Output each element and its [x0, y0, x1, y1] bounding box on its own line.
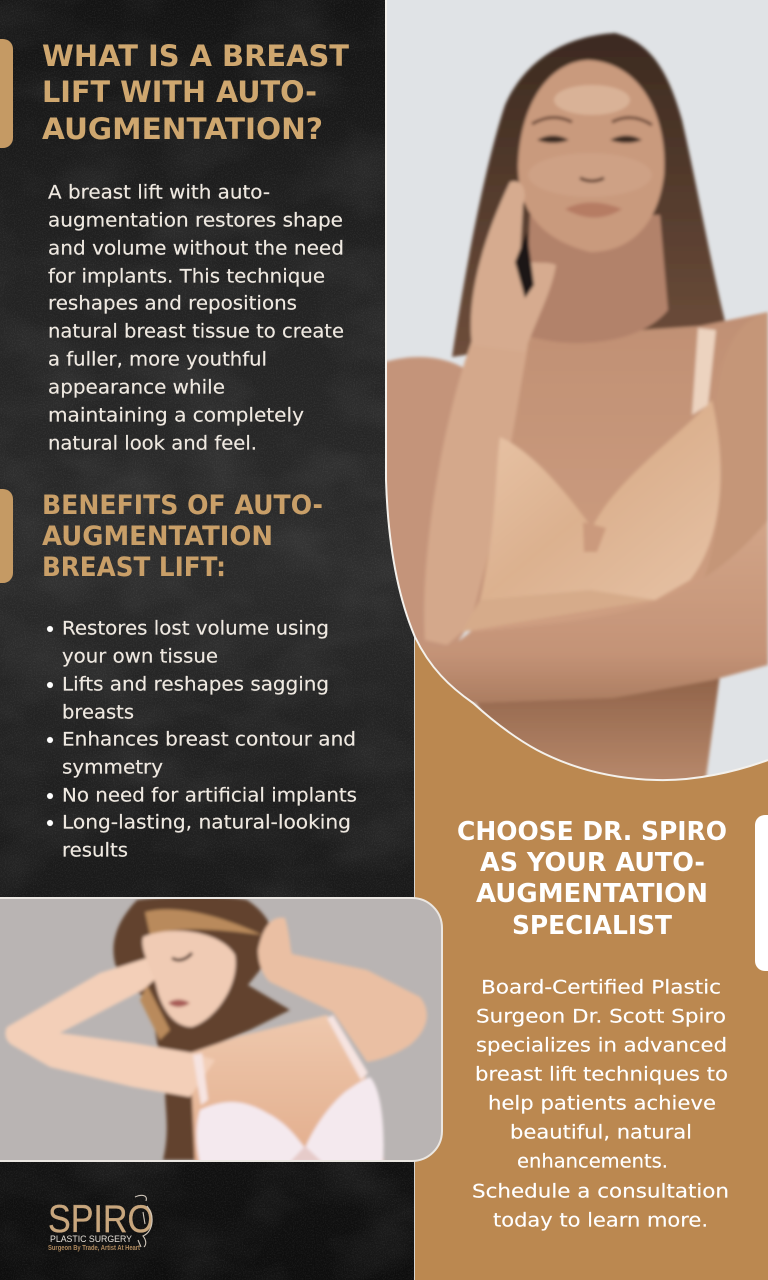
- logo: Spiro Plastic Surgery: Surgeon By Trade, Artist At Heart: [48, 1245, 141, 1252]
- heading: choose Dr. Spiro: SPECIALIST: [512, 911, 673, 941]
- heading: what is a breast lift: [42, 39, 349, 146]
- eye: [172, 953, 192, 960]
- heading: choose Dr. Spiro: [457, 817, 727, 941]
- lower torso: [474, 676, 722, 780]
- garment band: [462, 590, 655, 632]
- bullet list: benefits: Enhances breast contour and: [62, 730, 356, 751]
- face: [518, 60, 664, 252]
- text block: description: [48, 183, 344, 455]
- bullet list: benefits: your own tissue: [62, 647, 218, 668]
- text block: consultation: enhancements.: [517, 1152, 668, 1173]
- photo outline: [0, 898, 442, 1161]
- right arm: [258, 918, 427, 1062]
- forehead highlight: [554, 85, 630, 115]
- text block: description: and volume without the need: [48, 239, 344, 260]
- lips: [565, 202, 622, 218]
- photo outline curve: [386, 0, 768, 780]
- text block: description: A breast lift with auto-: [48, 183, 270, 204]
- garment bow: [583, 522, 606, 552]
- text block: description: natural breast tissue to create: [48, 322, 344, 343]
- left upper arm: [387, 355, 466, 650]
- garment: [197, 1077, 384, 1165]
- logo: Spiro Plastic Surgery: SPIRO: [48, 1198, 154, 1241]
- garment strap: [692, 328, 716, 415]
- heading: choose Dr. Spiro: CHOOSE DR. SPIRO: [457, 817, 727, 847]
- chest: [189, 1014, 366, 1160]
- face: [142, 931, 236, 1027]
- crossed forearm: [425, 523, 768, 704]
- text block: consultation: Schedule a consultation: [472, 1182, 729, 1203]
- heading: what is a breast lift: LIFT WITH AUTO-: [42, 75, 317, 109]
- neck: [525, 215, 668, 343]
- text block: description: natural look and feel.: [48, 434, 257, 455]
- text block: consultation: today to learn more.: [493, 1211, 708, 1232]
- heading: benefits: AUGMENTATION: [42, 521, 273, 552]
- text block: consultation: Surgeon Dr. Scott Spiro: [476, 1007, 726, 1028]
- heading: benefits: BREAST LIFT:: [42, 552, 226, 583]
- text block: description: for implants. This technique: [48, 267, 325, 288]
- bullet list: benefits: Long-lasting, natural-looking: [62, 813, 351, 834]
- bullet list: benefits: Lifts and reshapes sagging: [62, 675, 329, 696]
- bullet list: benefits: Restores lost volume using: [62, 619, 329, 640]
- photo: woman touching her face: [380, 0, 768, 800]
- heading: what is a breast lift: AUGMENTATION?: [42, 112, 323, 146]
- panel divider line: [414, 636, 416, 1280]
- hair: [113, 896, 290, 1160]
- heading: choose Dr. Spiro: AS YOUR AUTO-: [480, 848, 705, 878]
- accent tab: specialist heading: [755, 815, 768, 971]
- heading: what is a breast lift: WHAT IS A BREAST: [42, 39, 349, 73]
- straps: [193, 1015, 368, 1105]
- bullet list: benefits: breasts: [62, 703, 134, 724]
- text block: description: a fuller, more youthful: [48, 350, 267, 371]
- text block: consultation: help patients achieve: [488, 1094, 716, 1115]
- hand: [471, 181, 556, 352]
- text block: consultation: beautiful, natural: [510, 1123, 692, 1144]
- text block: consultation: specializes in advanced: [476, 1036, 727, 1057]
- chest and shoulders: [470, 312, 768, 640]
- left arm: [5, 958, 215, 1097]
- logo: Spiro Plastic Surgery: PLASTIC SURGERY: [50, 1234, 133, 1245]
- heading: benefits: [42, 490, 323, 583]
- accent tab: first heading: [0, 39, 13, 148]
- text block: description: appearance while: [48, 378, 225, 399]
- panel: tan specialist background: [415, 600, 768, 1280]
- lighter hair strands: [140, 909, 262, 1040]
- text block: consultation: breast lift techniques to: [475, 1065, 728, 1086]
- hair: [452, 33, 726, 357]
- text block: description: maintaining a completely: [48, 406, 304, 427]
- text block: consultation: [472, 978, 729, 1232]
- right upper arm: [700, 312, 768, 590]
- bullet list: benefits: symmetry: [62, 758, 163, 779]
- cheek highlight: [577, 174, 607, 186]
- raised forearm: [424, 340, 528, 645]
- text block: description: augmentation restores shape: [48, 211, 343, 232]
- eyes: [537, 136, 642, 143]
- accent tab: benefits heading: [0, 489, 13, 583]
- brows: [532, 117, 652, 125]
- bullet list: benefits: No need for artificial implants: [62, 786, 357, 807]
- heading: benefits: BENEFITS OF AUTO-: [42, 490, 323, 521]
- text block: description: reshapes and repositions: [48, 294, 297, 315]
- heading: choose Dr. Spiro: AUGMENTATION: [476, 879, 708, 909]
- logo: Spiro Plastic Surgery: [48, 1195, 154, 1252]
- nose: [580, 178, 604, 181]
- shadow by the hand: [515, 232, 534, 298]
- photo: woman with raised arms: [0, 896, 444, 1165]
- text block: consultation: Board-Certified Plastic: [481, 978, 721, 999]
- panel: dark textured background: [0, 0, 416, 1280]
- garment: [480, 400, 721, 600]
- bullet list: benefits: results: [62, 841, 128, 862]
- garment bow: [291, 1146, 320, 1160]
- bullet list: benefits: [47, 619, 357, 862]
- lips: [168, 1000, 190, 1007]
